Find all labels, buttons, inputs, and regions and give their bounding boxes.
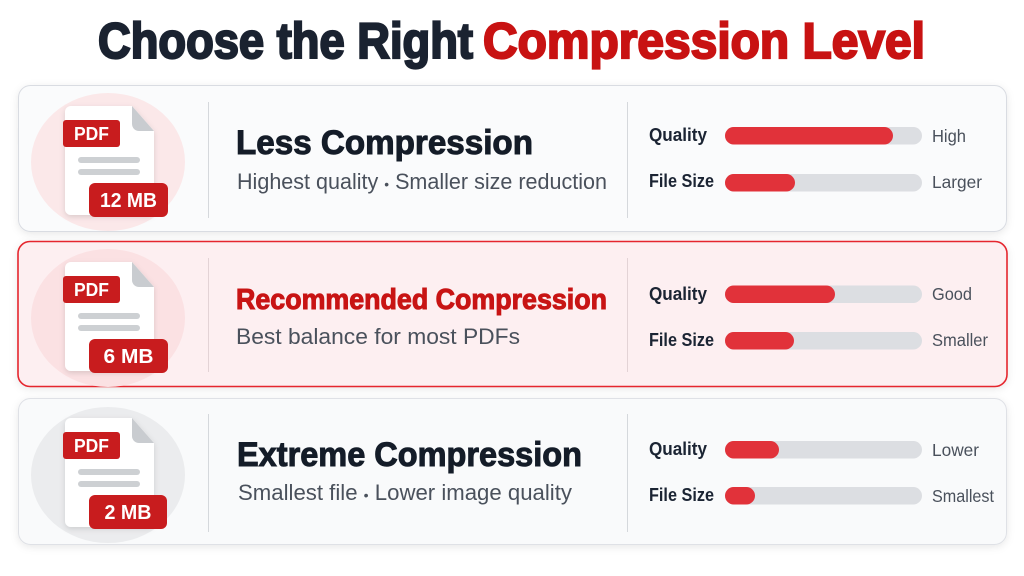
icon: PDF file 6 MB	[31, 249, 185, 387]
title: Choose the Right	[98, 13, 473, 69]
bar: quality high	[649, 125, 966, 146]
bar: file size larger: Larger	[932, 172, 982, 192]
heading: extreme compression: Extreme Compression	[237, 436, 582, 474]
bar: file size larger: File Size	[649, 171, 714, 191]
bar: file size larger	[649, 171, 982, 192]
icon: PDF file 12 MB: 12 MB	[100, 189, 157, 212]
description: Smallest file • Lower image quality	[238, 480, 572, 505]
icon: PDF file 12 MB: PDF	[74, 124, 109, 144]
bar: file size smaller: Smaller	[932, 330, 988, 350]
bar: file size smaller: File Size	[649, 330, 714, 350]
panel: recommended compression	[18, 242, 1007, 387]
panel: less compression	[18, 86, 1006, 232]
bar: quality lower	[649, 439, 979, 460]
bar: file size smallest: File Size	[649, 485, 714, 505]
title: Compression Level	[483, 13, 925, 69]
title	[98, 13, 925, 69]
bar: quality good	[649, 284, 972, 304]
description: Highest quality • Smaller size reduction	[237, 169, 607, 194]
bar: quality high: Quality	[649, 125, 707, 145]
bar: file size smallest	[649, 485, 994, 506]
bar: quality high: High	[932, 126, 966, 146]
icon: PDF file 2 MB: PDF	[74, 436, 109, 456]
panel: extreme compression	[18, 398, 1006, 544]
icon: PDF file 2 MB: 2 MB	[104, 501, 152, 524]
icon: PDF file 2 MB	[31, 407, 185, 543]
bar: file size smaller	[649, 330, 988, 350]
bar: file size smallest: Smallest	[932, 486, 994, 506]
icon: PDF file 12 MB	[31, 93, 185, 231]
description: Best balance for most PDFs	[236, 324, 520, 349]
heading: less compression: Less Compression	[236, 124, 533, 162]
heading: recommended compression: Recommended Compression	[236, 284, 607, 316]
icon: PDF file 6 MB: PDF	[74, 280, 109, 300]
bar: quality good: Good	[932, 284, 972, 304]
bar: quality good: Quality	[649, 284, 707, 304]
bar: quality lower: Lower	[932, 440, 979, 460]
bar: quality lower: Quality	[649, 439, 707, 459]
icon: PDF file 6 MB: 6 MB	[104, 345, 154, 368]
